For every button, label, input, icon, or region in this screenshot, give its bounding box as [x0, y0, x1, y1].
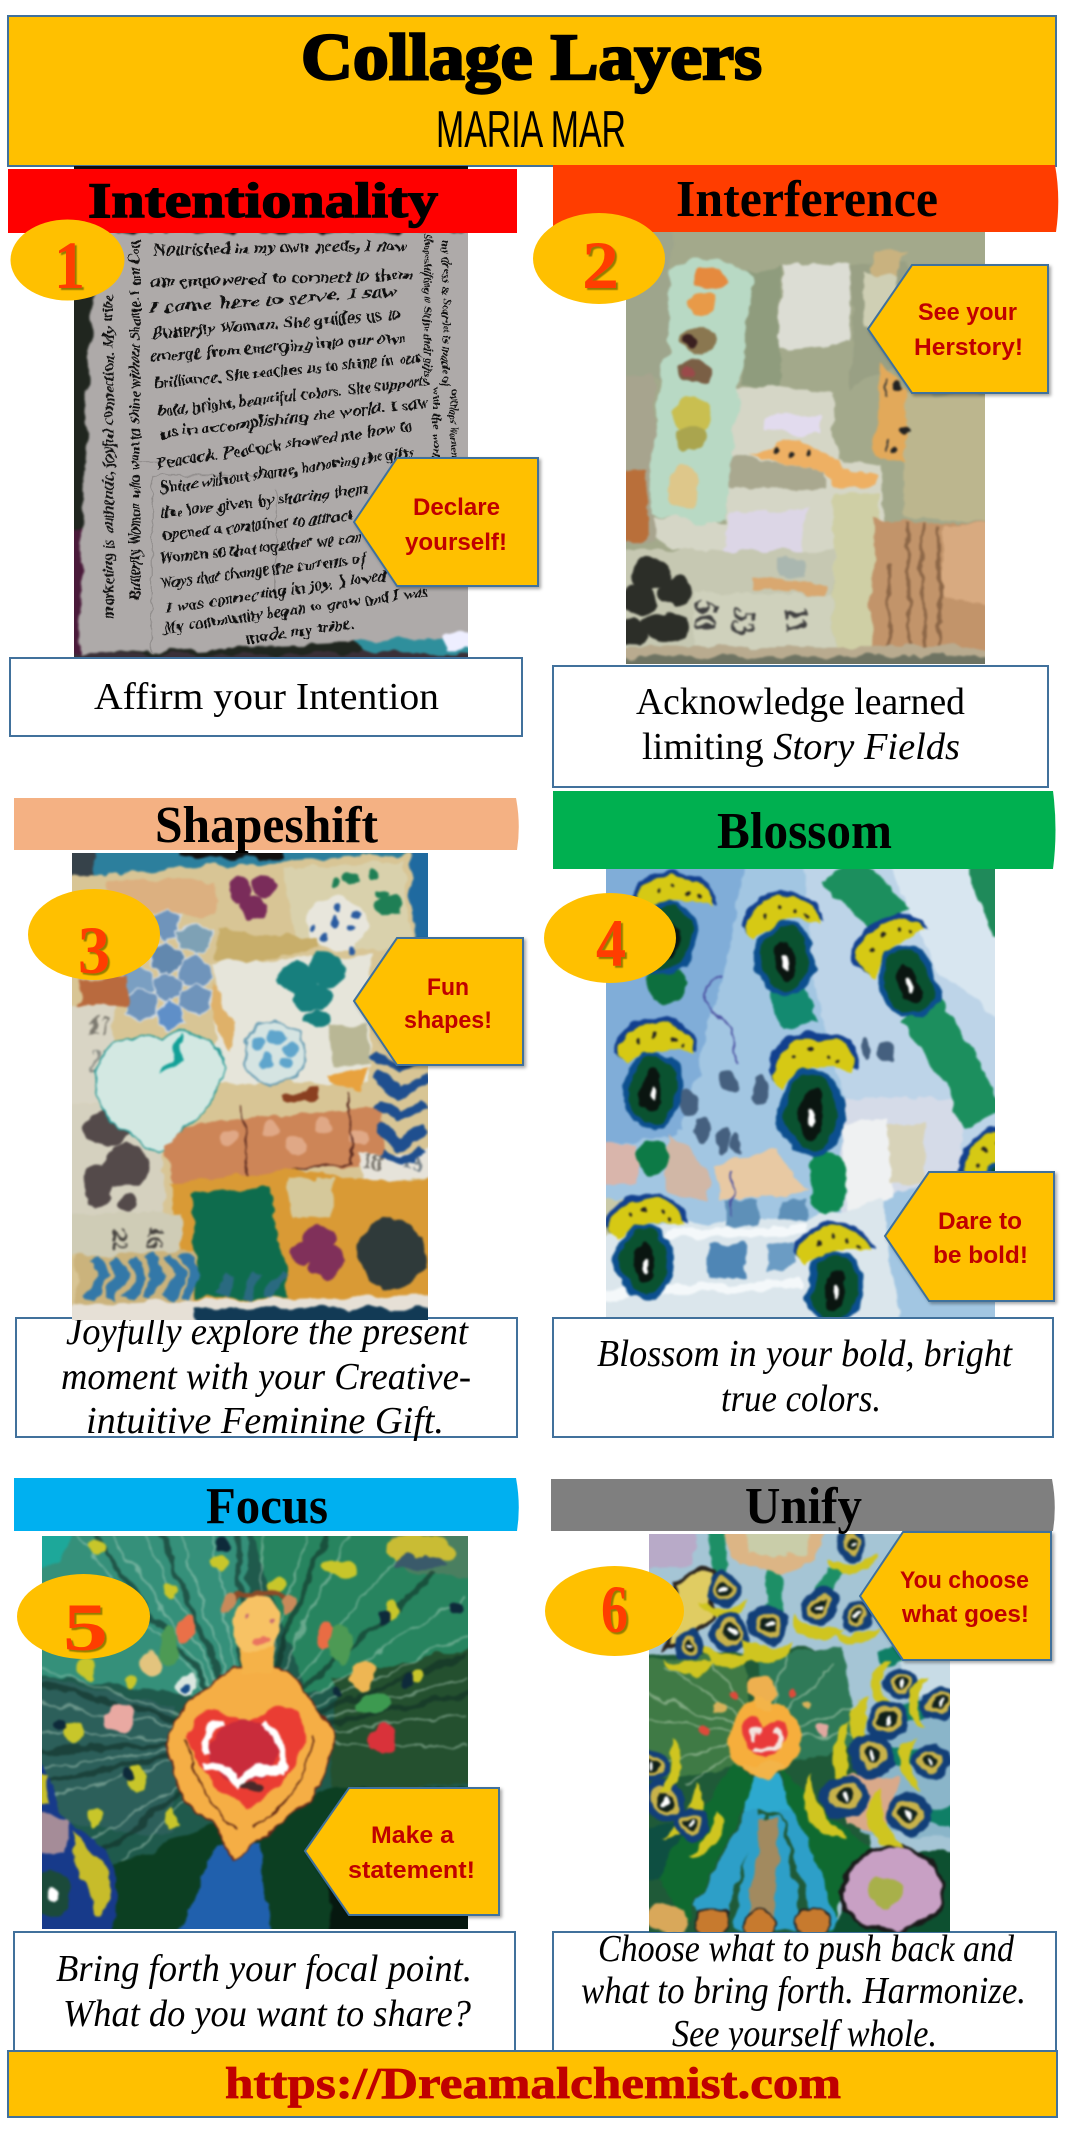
title: Collage Layers	[301, 21, 762, 94]
photo: handwritten page: us in accomplishing the world. I saw	[160, 394, 431, 442]
caption box 1	[10, 658, 522, 736]
photo: stencilled collage with hexagons: 19	[400, 1147, 420, 1177]
heading: Focus: Focus	[206, 1478, 328, 1535]
number badge 5: 5	[63, 1589, 108, 1665]
callout: See your Herstory	[868, 265, 1048, 393]
heading: Intentionality: Intentionality	[88, 172, 438, 228]
callout: You choose what goes: what goes!	[901, 1601, 1029, 1628]
caption box 3: intuitive Feminine Gift.	[86, 1400, 444, 1442]
callout: You choose what goes	[860, 1532, 1051, 1660]
photo: handwritten page: the love given by sharing them	[160, 481, 369, 522]
number badge 2	[533, 213, 665, 304]
caption box 6: See yourself whole.	[672, 2013, 937, 2055]
panel: 2 Interference	[533, 165, 1058, 787]
author name: MARIA MAR	[436, 101, 626, 159]
number badge 4	[544, 893, 676, 983]
heading: Focus	[14, 1478, 519, 1535]
photo: finished peacock collage	[649, 1534, 950, 1932]
photo: handwritten page: made my tribe.	[245, 616, 356, 647]
caption box 5: What do you want to share?	[63, 1993, 471, 2035]
heading: Interference: Interference	[676, 171, 938, 228]
number badge 6: 6	[601, 1571, 628, 1647]
heading: Intentionality	[8, 169, 517, 233]
callout: Declare yourself	[354, 458, 538, 586]
photo: stencilled collage with hexagons: 17	[91, 1013, 110, 1039]
photo: stencilled collage with hexagons: 23	[89, 1049, 109, 1075]
caption box 2: limiting Story Fields	[642, 726, 960, 768]
photo: handwritten page: marketing is authentic, joyful connection. My tribe	[100, 293, 117, 618]
caption box 6: what to bring forth. Harmonize.	[581, 1970, 1026, 2012]
photo: handwritten page: Ways that change the currents of	[158, 550, 367, 592]
heading: Blossom: Blossom	[717, 803, 892, 860]
title banner	[8, 16, 1056, 166]
callout: Declare yourself: Declare	[413, 494, 500, 521]
number badge 3	[28, 889, 160, 988]
photo: handwritten page: Nourished in my own needs, I now	[152, 238, 407, 259]
number badge 1	[10, 220, 124, 303]
panel: 5 Focus	[14, 1478, 519, 2057]
callout: Fun shapes: Fun	[427, 974, 469, 1001]
photo: peacock feather eyes	[606, 869, 995, 1317]
photo: stencilled collage with hexagons	[72, 853, 428, 1320]
caption box 5	[14, 1932, 515, 2057]
photo: handwritten page: with the world	[430, 387, 444, 464]
footer banner with URL	[8, 2051, 1057, 2117]
photo: handwritten page: my dress & Scarlet is made of	[440, 240, 454, 388]
photo: peacock woman with heart	[42, 1536, 468, 1929]
number badge 3: 3	[78, 912, 110, 988]
photo: newsprint collage with butterflies: 50	[687, 602, 724, 632]
callout: Fun shapes	[354, 938, 523, 1065]
footer banner with URL: https://Dreamalchemist.com	[225, 2059, 841, 2108]
heading: Unify	[551, 1478, 1055, 1535]
panel: 1 Intentionality	[8, 147, 538, 736]
number badge 6	[545, 1566, 684, 1656]
photo: handwritten page: I came here to serve. I saw	[148, 283, 398, 317]
photo: handwritten page: bold, bright, beautiful colors. She supports	[157, 372, 430, 421]
callout: You choose what goes: You choose	[900, 1567, 1029, 1594]
photo: handwritten page: Shapeshifting to Shine their gifts	[421, 233, 435, 377]
photo: handwritten page: Butterfly Woman. She guides us to	[150, 306, 401, 342]
caption box 4: Blossom in your bold, bright	[597, 1333, 1013, 1375]
heading: Unify: Unify	[745, 1478, 862, 1535]
photo: newsprint collage with butterflies: 53	[727, 608, 764, 635]
photo: handwritten page: opened a container to attract	[162, 507, 353, 544]
photo: handwritten page: Shine without shame, honoring the gifts	[160, 444, 415, 497]
photo: stencilled collage with hexagons: 18	[362, 1147, 383, 1177]
photo: stencilled collage with hexagons: 16	[141, 1228, 169, 1250]
caption box 3: moment with your Creative-	[61, 1356, 471, 1398]
heading: Shapeshift	[14, 797, 519, 854]
number badge 2: 2	[582, 227, 619, 303]
photo: handwritten page: emerge from emerging into our own	[149, 329, 408, 366]
panel: 4 Blossom	[544, 791, 1066, 1437]
photo: handwritten page: Peacock. Peacock showed me how to	[155, 417, 414, 472]
number badge 5	[17, 1574, 150, 1665]
heading: Interference	[553, 165, 1058, 232]
photo: handwritten page: brilliance. She teaches us to shine in our	[154, 349, 423, 392]
photo: stencilled collage with hexagons: 22	[106, 1228, 134, 1250]
callout: Make a statement	[305, 1788, 499, 1915]
photo: handwritten page: Butterfly Woman who want to Shine without Shame. I am Con	[127, 240, 144, 601]
caption box 3: Joyfully explore the present	[66, 1311, 469, 1353]
heading: Blossom	[553, 791, 1056, 869]
caption box 1: Affirm your Intention	[94, 676, 439, 718]
callout: Make a statement: statement!	[348, 1857, 475, 1884]
photo: handwritten page: am empowered to connect to them	[151, 267, 413, 291]
callout: Dare to be bold: be bold!	[933, 1242, 1028, 1269]
caption box 4	[553, 1318, 1053, 1437]
callout: See your Herstory: Herstory!	[914, 334, 1023, 361]
callout: Dare to be bold: Dare to	[938, 1208, 1022, 1235]
caption box 2: Acknowledge learned	[636, 681, 965, 723]
caption box 3	[16, 1311, 517, 1442]
caption box 2	[553, 666, 1048, 787]
number badge 1: 1	[54, 227, 85, 303]
caption box 6: Choose what to push back and	[598, 1928, 1015, 1970]
callout: Dare to be bold	[885, 1172, 1054, 1301]
photo: newsprint collage with butterflies	[626, 232, 985, 664]
heading: Shapeshift: Shapeshift	[155, 797, 379, 854]
photo: handwritten page: Women so that together we can	[159, 529, 363, 567]
photo: handwritten page: My community began to grow and I was	[161, 583, 430, 637]
caption box 4: true colors.	[721, 1378, 881, 1420]
callout: Fun shapes: shapes!	[404, 1007, 492, 1034]
caption box 5: Bring forth your focal point.	[56, 1948, 472, 1990]
photo: handwritten page: overlaps Women	[448, 390, 462, 457]
callout: Declare yourself: yourself!	[405, 529, 507, 556]
photo: handwritten page	[74, 166, 468, 657]
photo: handwritten page: I was connecting in joy. I loved	[164, 567, 389, 617]
photo: newsprint collage with butterflies: 11	[777, 607, 814, 632]
caption box 6	[553, 1928, 1056, 2057]
panel: 3 Shapeshift	[14, 797, 523, 1442]
callout: See your Herstory: See your	[918, 299, 1017, 326]
number badge 4: 4	[596, 905, 626, 981]
callout: Make a statement: Make a	[371, 1822, 455, 1849]
panel: 6 Unify	[545, 1478, 1056, 2057]
